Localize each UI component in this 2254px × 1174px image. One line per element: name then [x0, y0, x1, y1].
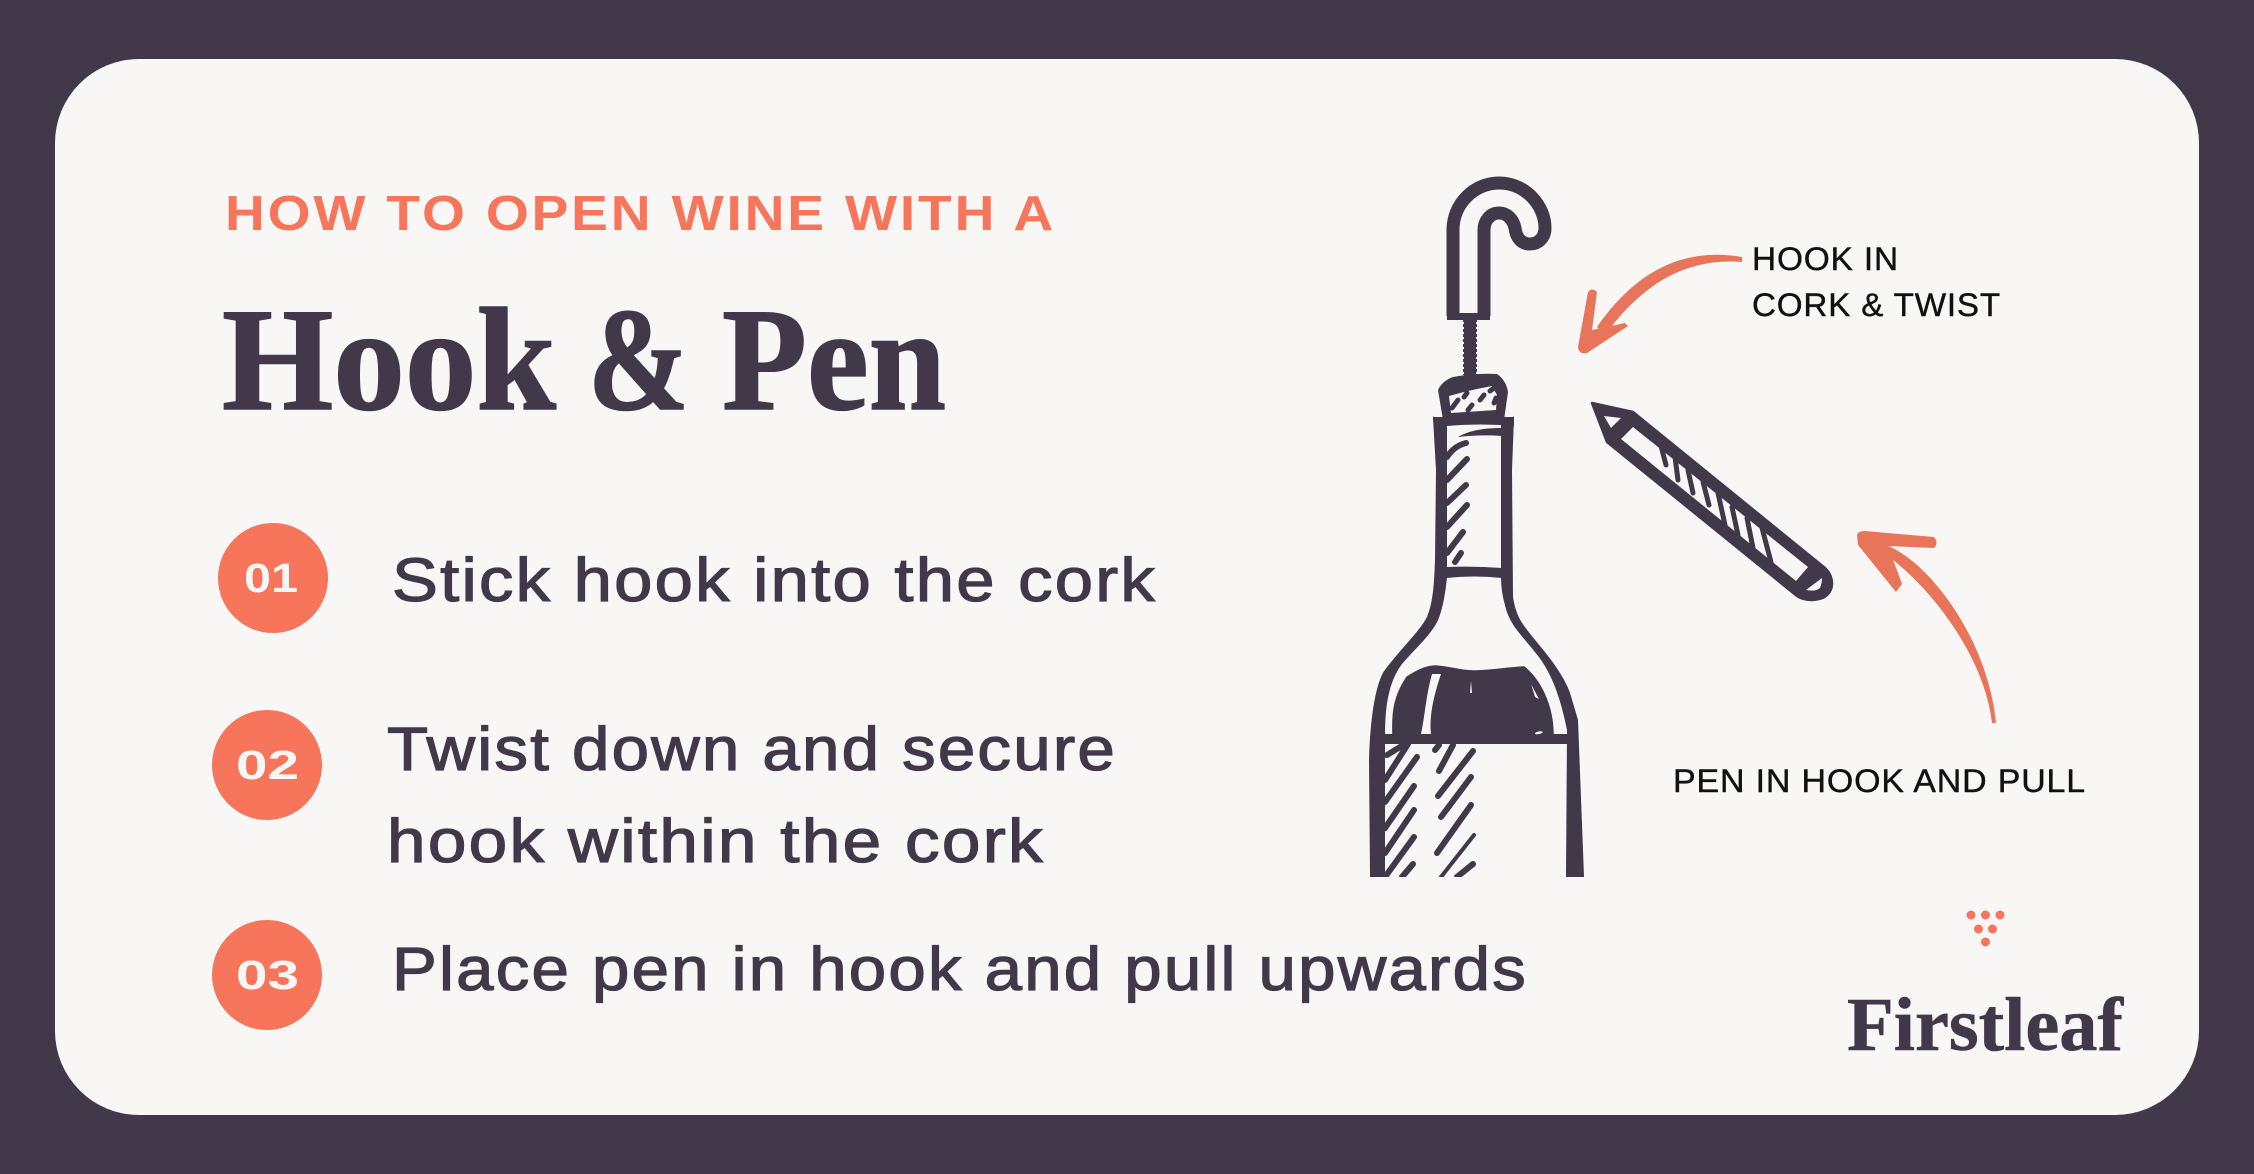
label: hook in cork and twist [1752, 241, 2001, 323]
icon: logo grape dots [1966, 910, 2004, 946]
arrow: to hook [1578, 255, 1742, 353]
step 1 text: Stick hook into the cork [392, 546, 1157, 614]
eyebrow heading: HOW TO OPEN WINE WITH A [225, 187, 1056, 241]
title: & [588, 278, 689, 441]
step 3 number: 03 [236, 952, 299, 998]
wine [1393, 666, 1553, 735]
step 2 text: Twist down and secure [387, 715, 1117, 783]
step 2 badge [212, 710, 322, 820]
title [222, 278, 946, 441]
step 2 [212, 710, 1117, 875]
step 3 [212, 920, 1528, 1030]
step 3 text: Place pen in hook and pull upwards [392, 935, 1528, 1003]
arrow: to pen [1857, 531, 1996, 723]
icon: hook [1447, 183, 1545, 377]
neck hatching [1447, 443, 1467, 562]
collar [1433, 417, 1514, 428]
wine highlights [1421, 674, 1543, 734]
bottle hatching [1385, 744, 1474, 877]
title: Pen [722, 278, 946, 441]
icon: pen [1592, 403, 1832, 600]
step 1 [218, 523, 1157, 633]
step 1 number: 01 [244, 555, 298, 601]
step 2 text: hook within the cork [387, 807, 1045, 875]
neck band [1446, 567, 1502, 578]
bottle left wall [1370, 418, 1446, 876]
step 1 badge [218, 523, 328, 633]
step 2 number: 02 [236, 742, 299, 788]
label: hook in cork and twist: CORK & TWIST [1752, 287, 2001, 323]
bottle right wall [1502, 418, 1583, 876]
icon: wine bottle [1370, 374, 1583, 877]
title: Hook [222, 278, 556, 441]
step 2 text [387, 715, 1117, 875]
label: pen in hook and pull: PEN IN HOOK AND PULL [1673, 763, 2086, 799]
label: hook in cork and twist: HOOK IN [1752, 241, 1899, 277]
step 3 badge [212, 920, 322, 1030]
logo wordmark: Firstleaf [1847, 983, 2125, 1067]
cork [1438, 374, 1508, 420]
